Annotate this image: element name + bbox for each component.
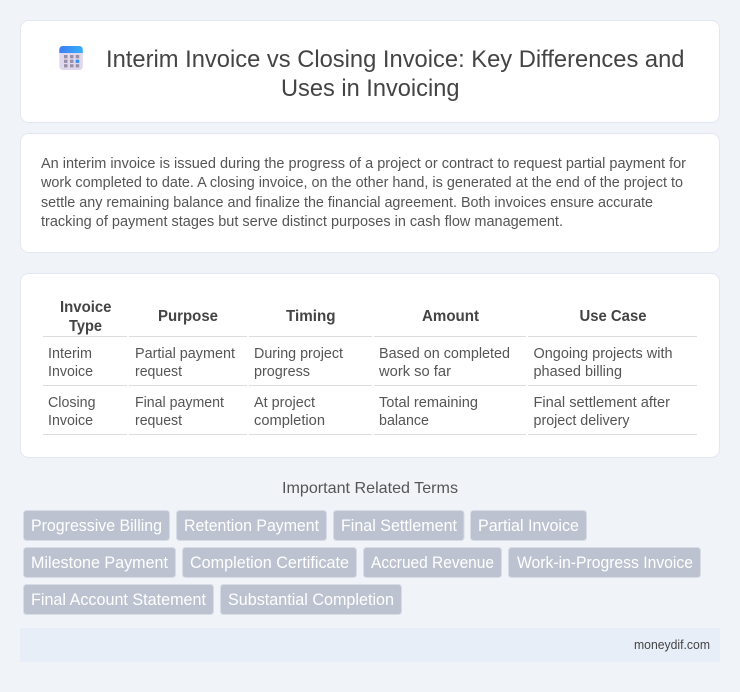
tag: retention payment — [176, 510, 326, 540]
icon: calendar — [59, 46, 83, 70]
table row: closing invoice: request — [135, 413, 182, 429]
table row: interim invoice: During project — [254, 346, 343, 362]
text block: description paragraph: work completed to date. A closing invoice, on the other hand, is generated at the end of the project to — [40, 175, 683, 191]
table row: closing invoice — [43, 395, 697, 435]
tag: retention payment: Retention Payment — [184, 517, 319, 535]
table header row: Invoice — [60, 299, 112, 316]
panel: title header — [20, 20, 720, 122]
table header row: Purpose — [158, 308, 218, 325]
footer bar — [20, 628, 720, 662]
table row: closing invoice: At project — [254, 395, 315, 411]
tag: milestone payment — [24, 548, 176, 578]
table header row: Use Case — [580, 308, 647, 325]
tag: final settlement: Final Settlement — [341, 517, 457, 535]
table row: interim invoice: phased billing — [534, 364, 622, 380]
tag: progressive billing — [24, 510, 170, 540]
panel: description — [20, 134, 720, 252]
table header row: Amount — [422, 308, 480, 325]
table row: interim invoice: work so far — [378, 364, 451, 380]
tag: completion certificate: Completion Certificate — [190, 554, 349, 572]
table row: interim invoice: Based on completed — [379, 346, 510, 362]
panel: comparison table — [20, 274, 720, 458]
tag: partial invoice: Partial Invoice — [478, 517, 579, 535]
table row: interim invoice: progress — [254, 364, 310, 380]
tag: substantial completion: Substantial Completion — [228, 591, 394, 609]
tag: progressive billing: Progressive Billing — [31, 517, 162, 535]
text block: description paragraph: An interim invoice is issued during the progress of a project or contract to request partial payment for — [41, 156, 686, 172]
text block: description paragraph — [40, 156, 686, 230]
table row: interim invoice: request — [135, 364, 182, 380]
table row: interim invoice: Invoice — [48, 364, 93, 380]
table row: closing invoice: project delivery — [534, 413, 630, 429]
table row: closing invoice: Final settlement after — [534, 395, 670, 411]
tag: final account statement — [24, 584, 214, 614]
table row: interim invoice: Partial payment — [135, 346, 235, 362]
tag: accrued revenue: Accrued Revenue — [371, 554, 494, 572]
table row: interim invoice: Interim — [48, 346, 92, 362]
table row: closing invoice: Final payment — [135, 395, 224, 411]
tag: substantial completion — [220, 584, 402, 614]
table row: interim invoice — [43, 346, 697, 386]
title: Interim Invoice vs Closing Invoice: Key Differences and — [106, 46, 684, 73]
table row: closing invoice: balance — [379, 413, 429, 429]
tag: work-in-progress invoice — [508, 548, 700, 578]
table row: interim invoice: Ongoing projects with — [534, 346, 672, 362]
tag: partial invoice — [470, 510, 586, 540]
heading: important related terms: Important Related Terms — [282, 480, 458, 497]
footer bar: moneydif.com — [634, 637, 710, 652]
table row: closing invoice: Invoice — [48, 413, 93, 429]
tag: accrued revenue — [364, 548, 502, 578]
table row: closing invoice: completion — [254, 413, 325, 429]
table header row: Type — [69, 318, 102, 335]
table header row: Timing — [286, 308, 336, 325]
text block: description paragraph: tracking of payment stages but serve distinct purposes in cash flow management. — [41, 214, 563, 230]
title: Uses in Invoicing — [281, 75, 460, 102]
table row: closing invoice: Total remaining — [379, 395, 478, 411]
tag: completion certificate — [182, 548, 356, 578]
text block: description paragraph: settle any remaining balance and finalize the financial agreement. Both invoices ensure accurate — [41, 195, 653, 211]
tag: final account statement: Final Account Statement — [31, 591, 206, 609]
tag list: related terms — [24, 510, 700, 614]
table header row — [43, 299, 697, 337]
tag: final settlement — [334, 510, 464, 540]
title — [106, 46, 684, 102]
tag: work-in-progress invoice: Work-in-Progress Invoice — [517, 554, 693, 572]
table row: closing invoice: Closing — [48, 395, 96, 411]
tag: milestone payment: Milestone Payment — [31, 554, 168, 572]
